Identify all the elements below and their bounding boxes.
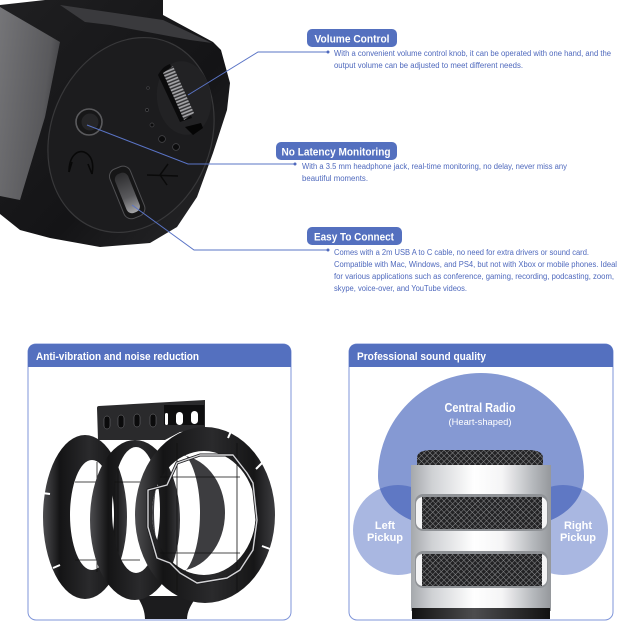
silver suspension — [148, 455, 257, 583]
badge: Easy To Connect — [314, 232, 394, 244]
description: Comes with a 2m USB A to C cable, no need for extra drivers or sound card. — [334, 248, 589, 257]
panel header — [28, 344, 291, 367]
central label: (Heart-shaped) — [448, 417, 512, 428]
right label: Right — [564, 520, 592, 532]
description — [334, 49, 612, 70]
stem — [139, 596, 194, 619]
icon: headphones — [69, 152, 93, 174]
left pickup lobe — [353, 485, 443, 575]
upper slot — [415, 494, 548, 531]
front wires — [160, 443, 240, 592]
headphone jack — [76, 109, 102, 135]
panel header — [349, 344, 613, 367]
panel header: Professional sound quality — [357, 351, 487, 363]
mic face plate — [19, 12, 243, 258]
connector: USB — [132, 205, 330, 252]
lobe overlaps — [380, 485, 582, 520]
rear ring — [43, 435, 127, 599]
left label: Left — [375, 520, 395, 532]
indicator lights — [146, 87, 179, 150]
inner band — [152, 455, 225, 571]
left label: Pickup — [367, 532, 403, 544]
badge — [307, 29, 397, 47]
lower slot — [415, 551, 548, 588]
badge: Volume Control — [314, 34, 390, 46]
top highlight — [60, 5, 212, 43]
callout: volume control — [307, 29, 612, 70]
front ring — [135, 427, 275, 603]
central label: Central Radio — [444, 401, 516, 415]
metal body — [411, 465, 551, 611]
badge: No Latency Monitoring — [282, 146, 390, 158]
panel header: Anti-vibration and noise reduction — [36, 351, 199, 363]
dark base — [412, 608, 550, 619]
left label — [367, 520, 403, 544]
top grille — [417, 450, 543, 465]
description: for various applications such as conference, gaming, recording, podcasting, zoom, — [334, 272, 614, 281]
mounting rail — [97, 400, 205, 440]
description: output volume can be adjusted to meet different needs. — [334, 61, 523, 70]
USB-C port — [107, 164, 147, 221]
description: beautiful moments. — [302, 174, 368, 183]
ring notches — [42, 429, 270, 568]
description — [334, 248, 617, 293]
icon: USB — [147, 164, 178, 185]
right label — [560, 520, 596, 544]
right pickup lobe — [518, 485, 608, 575]
shock mount — [42, 400, 275, 620]
description: skype, voice-over, and YouTube videos. — [334, 284, 467, 293]
side panel — [0, 7, 60, 200]
rear wires — [75, 462, 140, 572]
mic body — [0, 0, 230, 247]
microphone head — [411, 450, 551, 619]
right label: Pickup — [560, 532, 596, 544]
volume knob — [152, 58, 216, 138]
middle ring — [90, 440, 180, 600]
connector: monitoring — [87, 125, 296, 166]
connector: volume — [188, 50, 330, 95]
callout: no latency monitoring — [276, 142, 567, 183]
microphone rear photo — [0, 0, 243, 258]
description: With a convenient volume control knob, it can be operated with one hand, and the — [334, 49, 612, 58]
panel: anti-vibration — [28, 344, 291, 620]
panel frame — [349, 344, 613, 620]
panel: professional sound quality — [349, 344, 613, 620]
central label — [444, 401, 516, 428]
central radio lobe — [378, 373, 584, 520]
description: Compatible with Mac, Windows, and PS4, but not with Xbox or mobile phones. Ideal — [334, 260, 617, 269]
panel frame — [28, 344, 291, 620]
description — [302, 162, 567, 183]
badge — [276, 142, 397, 160]
badge — [307, 227, 402, 245]
description: With a 3.5 mm headphone jack, real-time monitoring, no delay, never miss any — [302, 162, 567, 171]
callout: easy to connect — [307, 227, 617, 293]
